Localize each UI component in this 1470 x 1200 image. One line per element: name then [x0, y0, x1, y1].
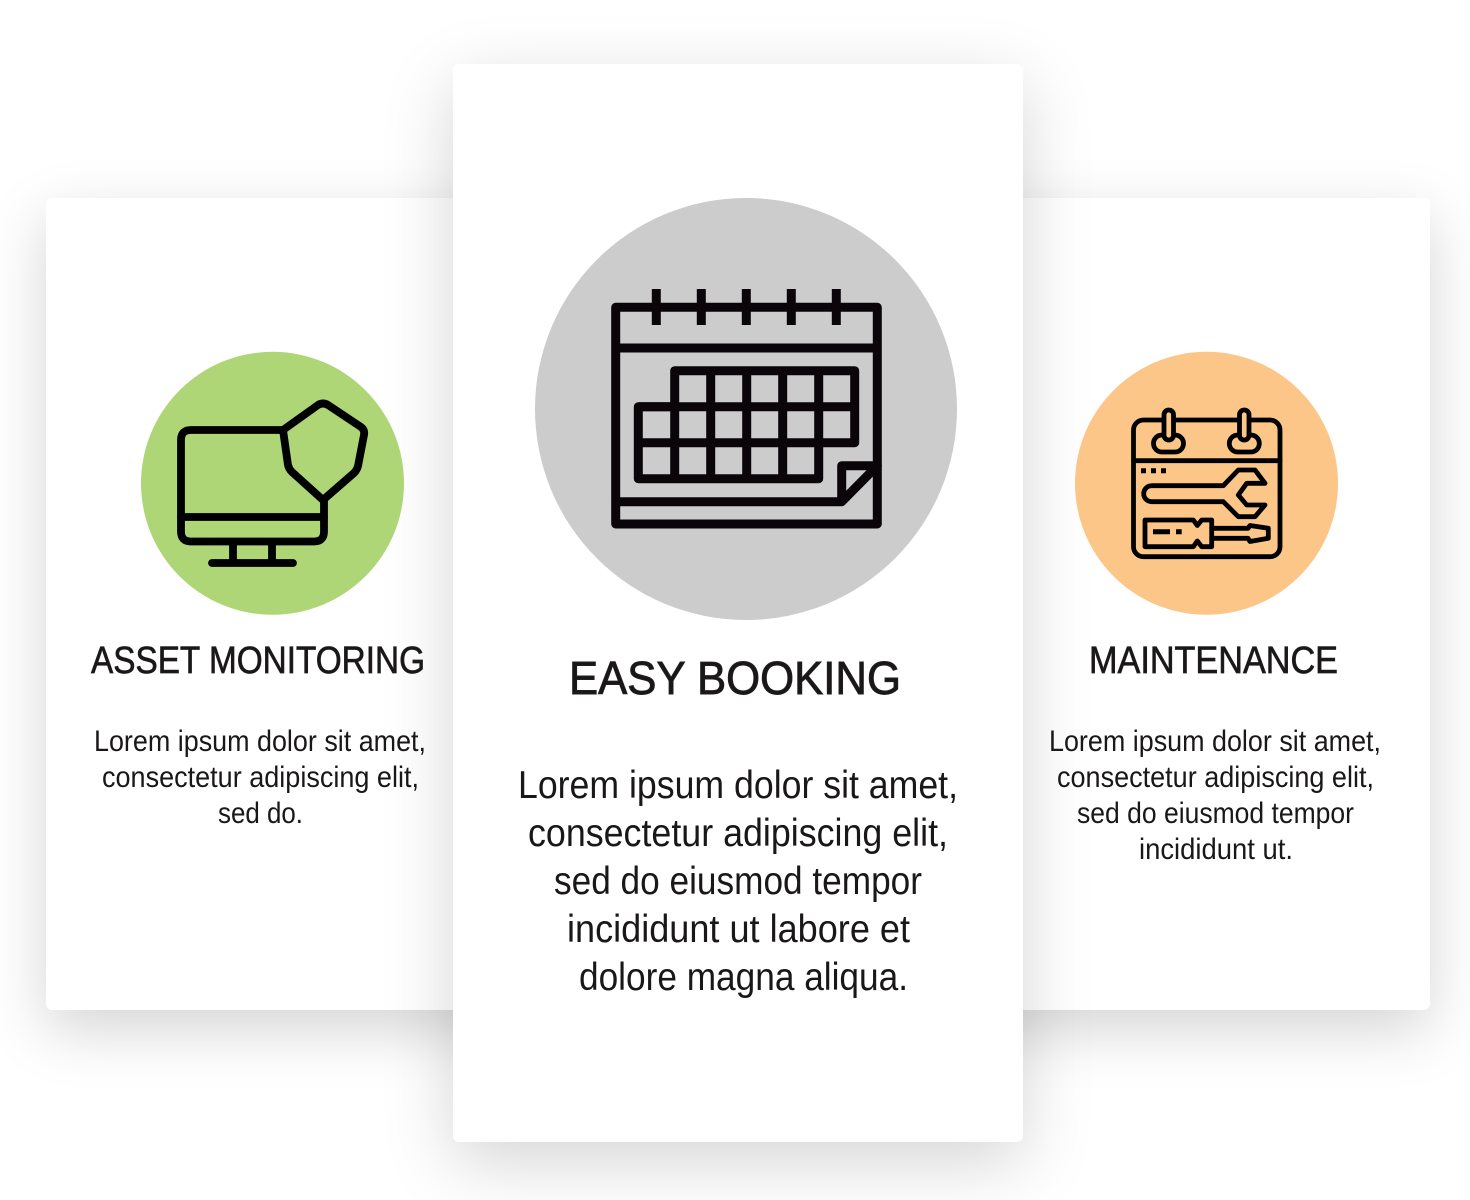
- panel: maintenance card: [930, 198, 1430, 1010]
- text block: maintenance description: incididunt ut.: [1139, 833, 1293, 866]
- text block: asset monitoring description: [94, 725, 426, 830]
- text block: easy booking description: consectetur adipiscing elit,: [528, 812, 948, 855]
- text block: asset monitoring description: Lorem ipsum dolor sit amet,: [94, 725, 426, 758]
- heading: asset monitoring: ASSET MONITORING: [91, 640, 425, 682]
- text block: easy booking description: incididunt ut labore et: [567, 908, 910, 951]
- maintenance content: [1049, 352, 1381, 866]
- icon: calendar: [535, 198, 957, 620]
- text block: maintenance description: consectetur adipiscing elit,: [1057, 761, 1374, 794]
- heading: maintenance: MAINTENANCE: [1089, 640, 1338, 682]
- panel: easy booking card: [453, 64, 1023, 1142]
- text block: asset monitoring description: consectetur adipiscing elit,: [102, 761, 419, 794]
- text block: easy booking description: sed do eiusmod tempor: [554, 860, 922, 903]
- text block: easy booking description: dolore magna aliqua.: [579, 956, 908, 999]
- asset monitoring content: [91, 352, 426, 830]
- text block: easy booking description: [518, 764, 958, 999]
- icon: calendar with wrench and screwdriver: [1075, 352, 1338, 615]
- text block: easy booking description: Lorem ipsum dolor sit amet,: [518, 764, 958, 807]
- easy booking content: [518, 198, 958, 999]
- panel: asset monitoring card: [46, 198, 546, 1010]
- heading: easy booking: EASY BOOKING: [569, 652, 901, 704]
- text block: maintenance description: [1049, 725, 1381, 866]
- icon: monitor with shield: [141, 352, 404, 615]
- text block: maintenance description: sed do eiusmod tempor: [1077, 797, 1354, 830]
- text block: asset monitoring description: sed do.: [218, 797, 303, 830]
- text block: maintenance description: Lorem ipsum dolor sit amet,: [1049, 725, 1381, 758]
